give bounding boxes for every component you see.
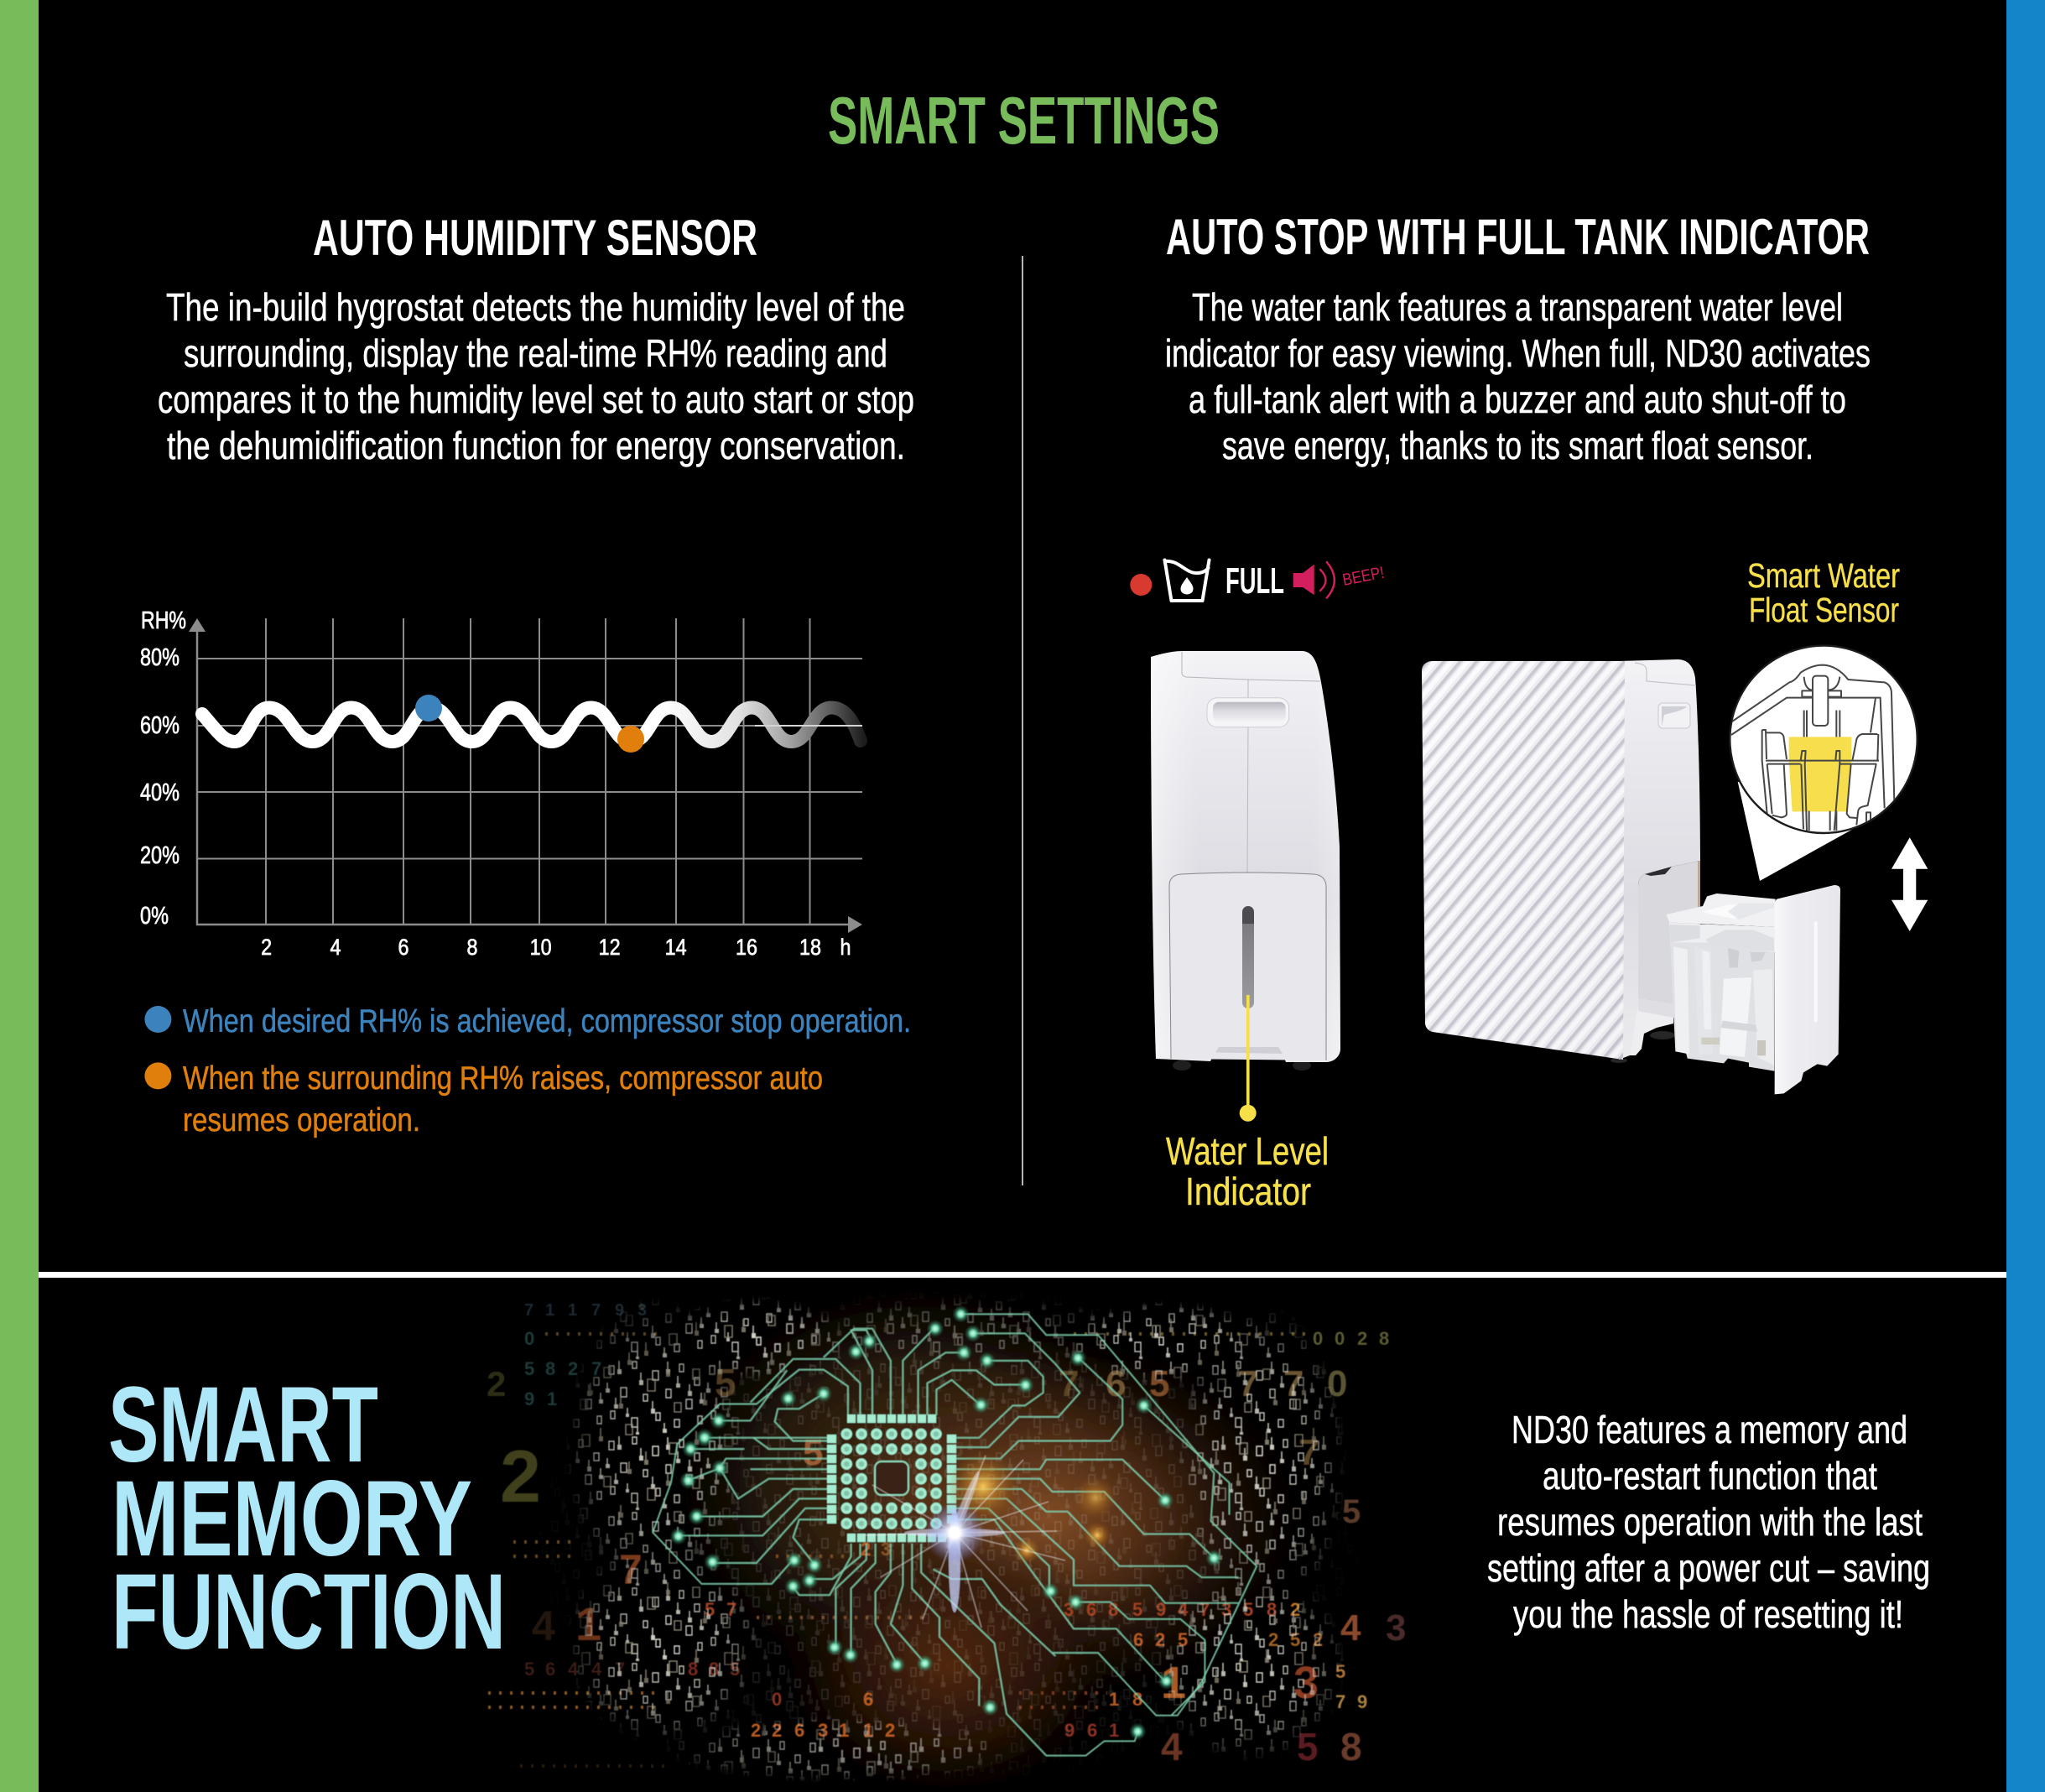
digits: 7: [1059, 1363, 1079, 1404]
text block: tank description: save energy, thanks to its smart float sensor.: [1222, 424, 1813, 467]
x axis labels: 14: [665, 935, 687, 960]
digits: 1: [1161, 1658, 1186, 1708]
callout: float sensor magnifier: [1730, 646, 1918, 881]
digits: 8: [1379, 1328, 1389, 1349]
processor chip: [827, 1414, 956, 1542]
legend text: orange: [183, 1060, 823, 1138]
digits: 6: [1087, 1720, 1097, 1741]
callout: water level indicator: Water Level: [1166, 1129, 1329, 1173]
legend text: orange: When the surrounding RH% raises, compressor auto: [183, 1060, 823, 1097]
digits: 2: [885, 1720, 895, 1741]
label: smart water float sensor: Float Sensor: [1749, 591, 1899, 629]
x axis labels: 8: [466, 935, 478, 960]
digits: 9: [524, 1388, 534, 1409]
text block: humidity description: surrounding, display the real-time RH% reading and: [184, 331, 887, 375]
marker: compressor resume: [617, 726, 644, 753]
digits: 5: [1243, 1599, 1253, 1620]
digits: 7: [591, 1358, 601, 1379]
text block: tank description: indicator for easy viewing. When full, ND30 activates: [1165, 331, 1871, 375]
legend dot: blue: [144, 1006, 171, 1033]
digits: 4: [591, 1659, 602, 1680]
digits: 8: [1267, 1599, 1277, 1620]
digits: 1: [839, 1720, 849, 1741]
digits: 1: [1109, 1689, 1119, 1710]
digits: 0: [772, 1689, 782, 1710]
digits: 8: [709, 1659, 719, 1680]
digits: 1: [575, 1597, 601, 1650]
digits: 3: [637, 1301, 647, 1320]
digits: 7: [726, 1599, 736, 1620]
digits: 2: [1268, 1629, 1278, 1650]
digits: 9: [1064, 1720, 1075, 1741]
text block: humidity description: the dehumidification function for energy conservation.: [167, 424, 905, 467]
light flare: [864, 1451, 1117, 1628]
y axis labels: 20%: [140, 842, 180, 869]
digits: 1: [545, 1301, 554, 1320]
arrow: float up and down: [1891, 837, 1928, 931]
water tank door: [1169, 873, 1326, 1060]
heading: smart memory function: MEMORY: [112, 1459, 472, 1579]
digits: 5: [524, 1358, 534, 1379]
digits: 3: [1386, 1607, 1406, 1649]
panel: smart memory function: [108, 1275, 1930, 1792]
digits: 8: [1132, 1689, 1142, 1710]
digits: 7: [1199, 1599, 1210, 1620]
digits: 0: [1327, 1363, 1347, 1404]
x axis labels: 16: [736, 935, 757, 960]
indicator: full alert: [1130, 560, 1386, 602]
digits: 3: [881, 1539, 891, 1560]
y axis labels: [140, 607, 186, 930]
digits: 0: [1313, 1328, 1323, 1349]
icon: speaker: [1293, 562, 1335, 598]
y axis labels: 0%: [140, 903, 169, 930]
text block: memory description: [1487, 1408, 1930, 1636]
y axis labels: 60%: [140, 712, 180, 739]
label: smart water float sensor: [1747, 556, 1900, 629]
digits: 2: [1313, 1629, 1323, 1650]
digits: 6: [1106, 1363, 1126, 1404]
digits: 7: [591, 1301, 601, 1320]
y axis labels: RH%: [141, 607, 186, 634]
digits: 2: [500, 1435, 541, 1518]
digits: 7: [1238, 1363, 1258, 1404]
digits: 6: [1086, 1599, 1096, 1620]
product: side view dehumidifier: [1422, 659, 1700, 1063]
legend text: orange: resumes operation.: [183, 1102, 420, 1138]
diagram: float sensor: [1731, 665, 1894, 831]
digits: 6: [794, 1720, 804, 1741]
digits: 9: [1357, 1691, 1367, 1712]
icon: water basin: [1164, 560, 1210, 601]
digits: 7: [1298, 1432, 1319, 1473]
digits: 0: [1335, 1328, 1345, 1349]
label: beep: BEEP!: [1341, 564, 1386, 590]
dotted data rows: [488, 1334, 1309, 1766]
digits: 2: [1357, 1328, 1367, 1349]
callout: water level indicator: Indicator: [1185, 1169, 1311, 1213]
tank door: [1775, 885, 1840, 1094]
text block: humidity description: compares it to the humidity level set to auto start or stop: [158, 378, 914, 421]
digits: 5: [1290, 1629, 1300, 1650]
digits: 8: [1108, 1599, 1118, 1620]
circuit nodes: [670, 1305, 1222, 1740]
digits: 1: [1109, 1720, 1119, 1741]
pointer: [1738, 782, 1855, 881]
digits: 2: [487, 1364, 506, 1404]
panel: auto stop with full tank indicator: [1130, 209, 1928, 1213]
text block: tank description: a full-tank alert with a buzzer and auto shut-off to: [1189, 378, 1846, 421]
label: full: FULL: [1225, 560, 1284, 602]
digits: 7: [619, 1546, 643, 1593]
digits: 0: [524, 1328, 534, 1349]
digits: 4: [1161, 1725, 1183, 1769]
text block: memory description: ND30 features a memory and: [1512, 1408, 1907, 1451]
tank lid: [1667, 893, 1776, 927]
digits: 5: [803, 1432, 823, 1473]
digits: 7: [524, 1301, 533, 1320]
digits: 2: [772, 1720, 782, 1741]
digits: 7: [615, 1659, 625, 1680]
circuit traces: [653, 1314, 1257, 1756]
text block: memory description: setting after a power cut – saving: [1487, 1546, 1930, 1590]
tank body: [1669, 923, 1775, 1071]
legend text: blue: When desired RH% is achieved, compressor stop operation.: [183, 1003, 911, 1039]
text block: memory description: auto-restart function that: [1543, 1454, 1877, 1498]
text block: tank description: [1165, 285, 1871, 467]
digits: 5: [730, 1659, 740, 1680]
digits: 5: [1149, 1363, 1169, 1404]
axis arrow: hours: [848, 916, 862, 933]
image: circuit brain: [487, 1296, 1406, 1784]
digits: 2: [1290, 1599, 1300, 1620]
axis arrow: humidity: [189, 618, 206, 632]
digits: 8: [1340, 1725, 1362, 1769]
x axis labels: 10: [530, 935, 552, 960]
x axis labels: 12: [599, 935, 621, 960]
ribbed side panel: [1422, 661, 1625, 1060]
digits: 6: [1133, 1629, 1143, 1650]
chart: humidity over time: [140, 607, 862, 960]
label: smart water float sensor: Smart Water: [1747, 556, 1900, 595]
digits: 8: [545, 1358, 555, 1379]
x axis labels: 4: [330, 935, 341, 960]
digits: 3: [1064, 1599, 1074, 1620]
digits: 8: [688, 1659, 698, 1680]
left green band: [0, 0, 39, 1792]
x axis labels: 6: [398, 935, 409, 960]
digits: 4: [532, 1602, 555, 1649]
text block: memory description: resumes operation with the last: [1497, 1500, 1923, 1544]
digits: 5: [1335, 1661, 1345, 1682]
water level window: [1242, 906, 1254, 1008]
panel: auto humidity sensor: [140, 210, 914, 1138]
digits: 3: [818, 1720, 828, 1741]
digits: 3: [1293, 1658, 1319, 1708]
title: SMART SETTINGS: [828, 83, 1220, 158]
vertical divider: [1022, 256, 1023, 1185]
heading: smart memory function: SMART: [108, 1365, 378, 1485]
text block: humidity description: [158, 285, 914, 467]
callout: water level indicator: [1166, 995, 1329, 1213]
x axis labels: 2: [261, 935, 272, 960]
horizontal divider: [39, 1272, 2006, 1278]
digits: 1: [547, 1388, 557, 1409]
marker: compressor stop: [415, 695, 442, 721]
heading: smart memory function: FUNCTION: [112, 1552, 506, 1672]
handle: [1207, 698, 1289, 727]
digits: 1: [863, 1720, 873, 1741]
text block: humidity description: The in-build hygrostat detects the humidity level of the: [166, 285, 905, 329]
digits: 9: [1156, 1599, 1166, 1620]
digits: 5: [715, 1361, 736, 1404]
digits: 5: [1132, 1599, 1142, 1620]
text block: tank description: The water tank features a transparent water level: [1192, 285, 1843, 329]
digits: [487, 1301, 1406, 1769]
y axis labels: 40%: [140, 779, 180, 806]
icon: red light: [1130, 574, 1152, 596]
digits: 7: [1335, 1691, 1345, 1712]
digits: 5: [705, 1599, 715, 1620]
digits: 2: [751, 1720, 761, 1741]
product: front view dehumidifier: [1151, 651, 1340, 1071]
digits: 6: [863, 1689, 873, 1710]
right blue band: [2006, 0, 2045, 1792]
data specks: [565, 1296, 1345, 1782]
y axis labels: 80%: [140, 644, 180, 671]
product: removed water tank: [1667, 885, 1840, 1094]
digits: 5: [1297, 1725, 1319, 1769]
heading: smart memory function: [108, 1365, 506, 1672]
x axis labels: [261, 935, 851, 960]
digits: 5: [1342, 1493, 1361, 1530]
lens: [1730, 646, 1918, 833]
digits: 2: [861, 1539, 871, 1560]
x axis labels: 18: [799, 935, 821, 960]
digits: 5: [1178, 1629, 1188, 1650]
wave: humidity curve: [202, 708, 861, 742]
digits: 5: [524, 1659, 534, 1680]
digits: 1: [568, 1301, 577, 1320]
digits: 4: [568, 1659, 579, 1680]
digits: 7: [1283, 1363, 1303, 1404]
digits: 2: [568, 1358, 578, 1379]
digits: 6: [545, 1659, 555, 1680]
heading: auto humidity sensor: AUTO HUMIDITY SENSOR: [313, 210, 757, 266]
legend dot: orange: [144, 1062, 171, 1089]
digits: 9: [615, 1301, 624, 1320]
digits: 4: [1178, 1599, 1189, 1620]
legend: [144, 1003, 911, 1138]
float: yellow: [1789, 737, 1851, 811]
digits: 3: [1221, 1599, 1231, 1620]
text block: memory description: you the hassle of resetting it!: [1513, 1592, 1903, 1636]
digits: 4: [1340, 1607, 1361, 1649]
digits: 2: [1155, 1629, 1165, 1650]
x axis labels: h: [840, 935, 851, 960]
